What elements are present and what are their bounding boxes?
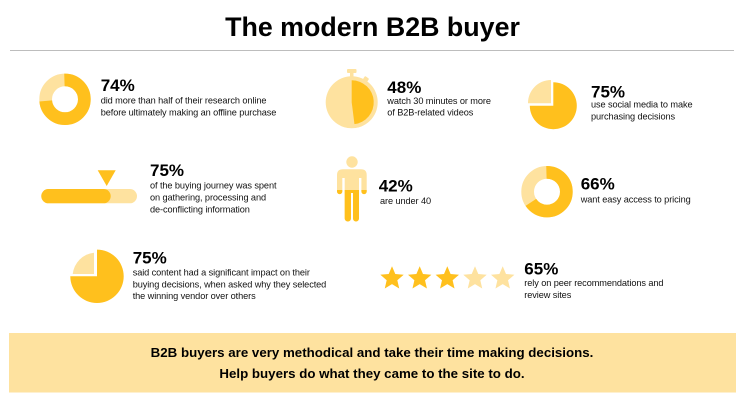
text: 66%: want easy access to pricing: [580, 195, 691, 205]
icon: pie 75% large: [70, 250, 124, 303]
text: 66%: [580, 174, 691, 205]
text: 75% social: 75%: [591, 83, 625, 102]
text: 75% journey: de-conflicting information: [150, 204, 250, 214]
stat: 75% buying journey: [41, 161, 277, 214]
text: 65%: 65%: [524, 260, 558, 279]
text: 65%: [524, 260, 663, 300]
stat: 42% under 40: [337, 156, 431, 222]
text: 74%: 74%: [101, 76, 135, 95]
stat: 48% videos: [326, 69, 491, 128]
callout banner: [9, 333, 736, 392]
text: 75% social: [591, 83, 693, 121]
icon: five stars: [380, 266, 514, 288]
stat: 75% social media: [528, 80, 693, 129]
stat: 66% pricing: [528, 172, 691, 211]
text: 75% journey: on gathering, processing and: [150, 192, 266, 202]
text: 75% content: 75%: [133, 248, 167, 267]
icon: person: [337, 156, 367, 222]
title: The modern B2B buyer: [225, 12, 520, 42]
callout banner: Help buyers do what they came to the site to do.: [219, 366, 525, 381]
text: 74%: before ultimately making an offline purchase: [101, 108, 276, 118]
text: 48%: 48%: [387, 78, 421, 97]
text: 48%: watch 30 minutes or more: [386, 96, 491, 106]
stat: 74% research online: [46, 76, 276, 119]
text: 75% journey: [150, 161, 277, 214]
text: 65%: review sites: [524, 290, 572, 300]
stat: 65% peer reviews: [380, 260, 663, 300]
text: 42%: are under 40: [380, 196, 431, 206]
text: 75% social: use social media to make: [591, 100, 693, 110]
text: 75% journey: of the buying journey was spent: [150, 180, 277, 190]
icon: donut 66%: [528, 172, 566, 211]
icon: donut 74%: [46, 80, 84, 119]
text: 74%: did more than half of their research online: [101, 95, 266, 105]
icon: progress bar: [41, 170, 137, 203]
text: 75% content: the winning vendor over others: [133, 291, 256, 301]
text: 42%: [379, 176, 431, 206]
text: 75% journey: 75%: [150, 161, 184, 180]
text: 66%: 66%: [581, 174, 615, 193]
callout banner: B2B buyers are very methodical and take their time making decisions.: [151, 345, 593, 360]
text: 75% content: [133, 248, 326, 301]
text: 75% social: purchasing decisions: [591, 111, 675, 121]
text: 75% content: said content had a significant impact on their: [133, 268, 310, 278]
icon: pie 75%: [528, 80, 577, 129]
text: 48%: [386, 78, 491, 118]
text: 75% content: buying decisions, when asked why they selected: [133, 279, 326, 289]
text: 48%: of B2B-related videos: [387, 108, 474, 118]
text: 42%: 42%: [379, 176, 413, 195]
text: 74%: [101, 76, 276, 118]
stat: 75% content impact: [70, 248, 326, 303]
text: 65%: rely on peer recommendations and: [524, 278, 663, 288]
icon: stopwatch: [326, 69, 378, 128]
